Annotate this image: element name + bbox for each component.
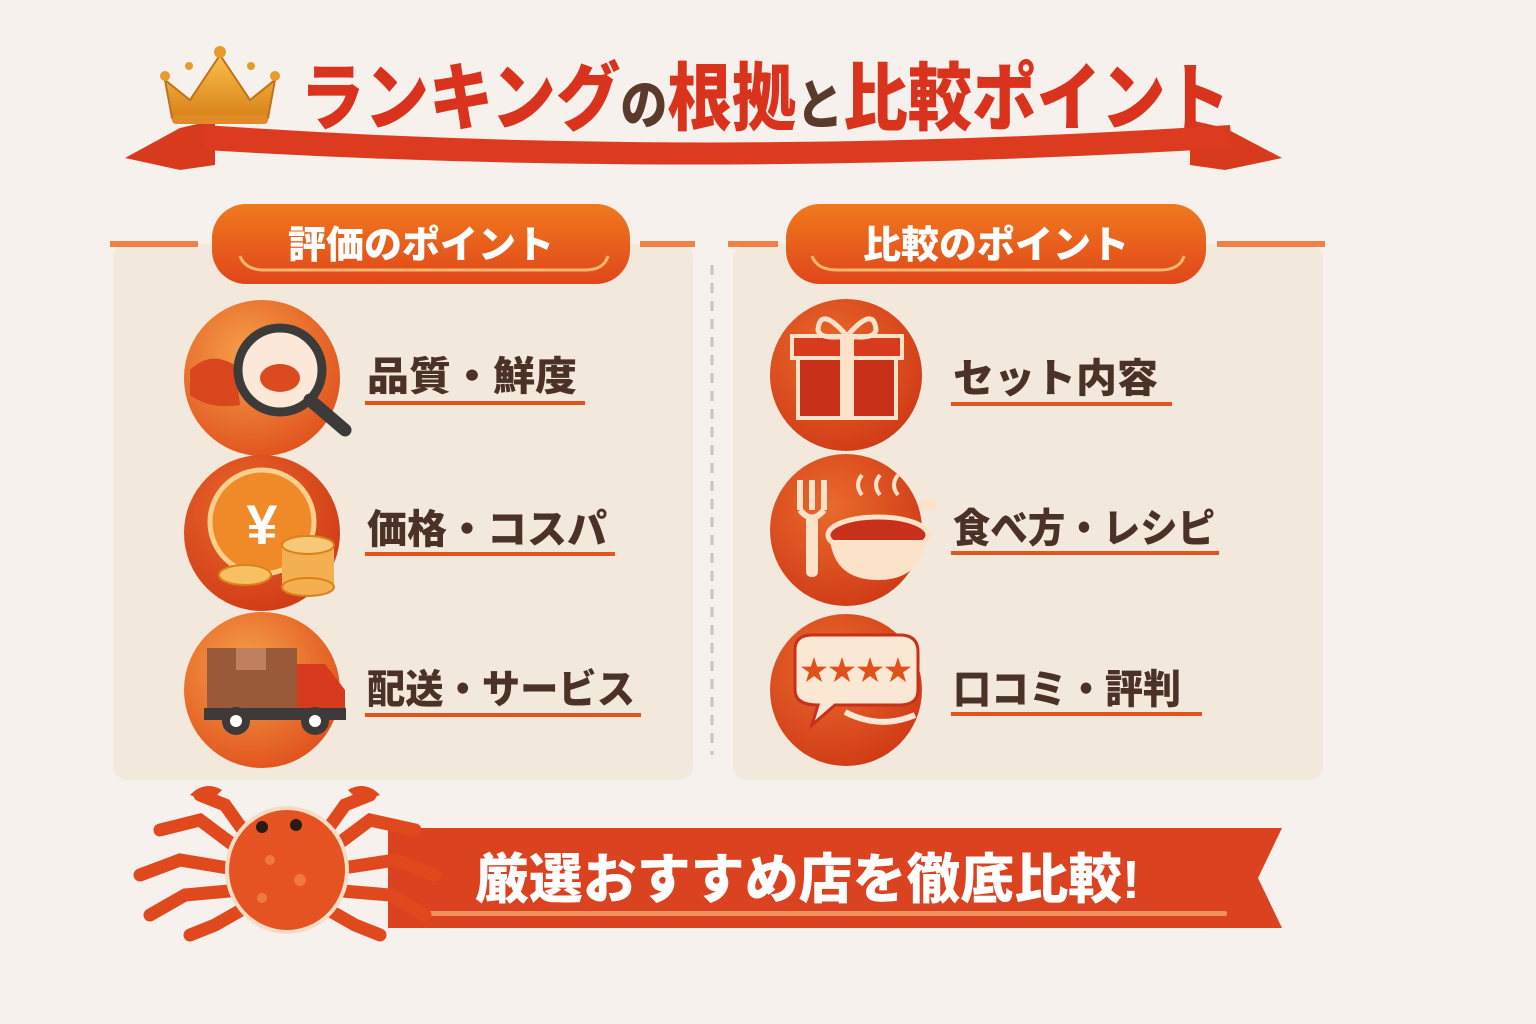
item: recipes [770,454,1219,606]
item: reviews: ★★★★ [800,655,912,686]
item: reviews: 口コミ・評判 [953,668,1181,712]
panel: comparison points [728,204,1325,780]
panel: evaluation points [110,204,695,780]
header pill: comparison: 比較のポイント [863,225,1129,267]
item: recipes: 食べ方・レシピ [953,507,1215,551]
item: set contents [770,299,1172,451]
title banner ribbon [125,120,1282,170]
item: price: 価格・コスパ [367,508,607,552]
icon: crown [160,46,280,124]
bottom banner: 厳選おすすめ店を徹底比較! [475,850,1140,910]
item: price [184,455,615,611]
item: reviews [770,614,1202,766]
item: quality [184,300,585,456]
item: delivery: 配送・サービス [367,667,635,712]
item: price: ¥ [246,493,278,556]
item: delivery [184,612,641,768]
header pill: evaluation: 評価のポイント [288,225,554,267]
title: ランキングの根拠と比較ポイント [300,57,1230,140]
item: quality: 品質・鮮度 [367,355,577,399]
header pill: comparison [786,204,1206,284]
header pill: evaluation [212,204,630,284]
divider [710,265,714,755]
bottom banner [388,828,1282,928]
icon: crab [140,786,435,935]
item: set contents: セット内容 [953,357,1158,401]
